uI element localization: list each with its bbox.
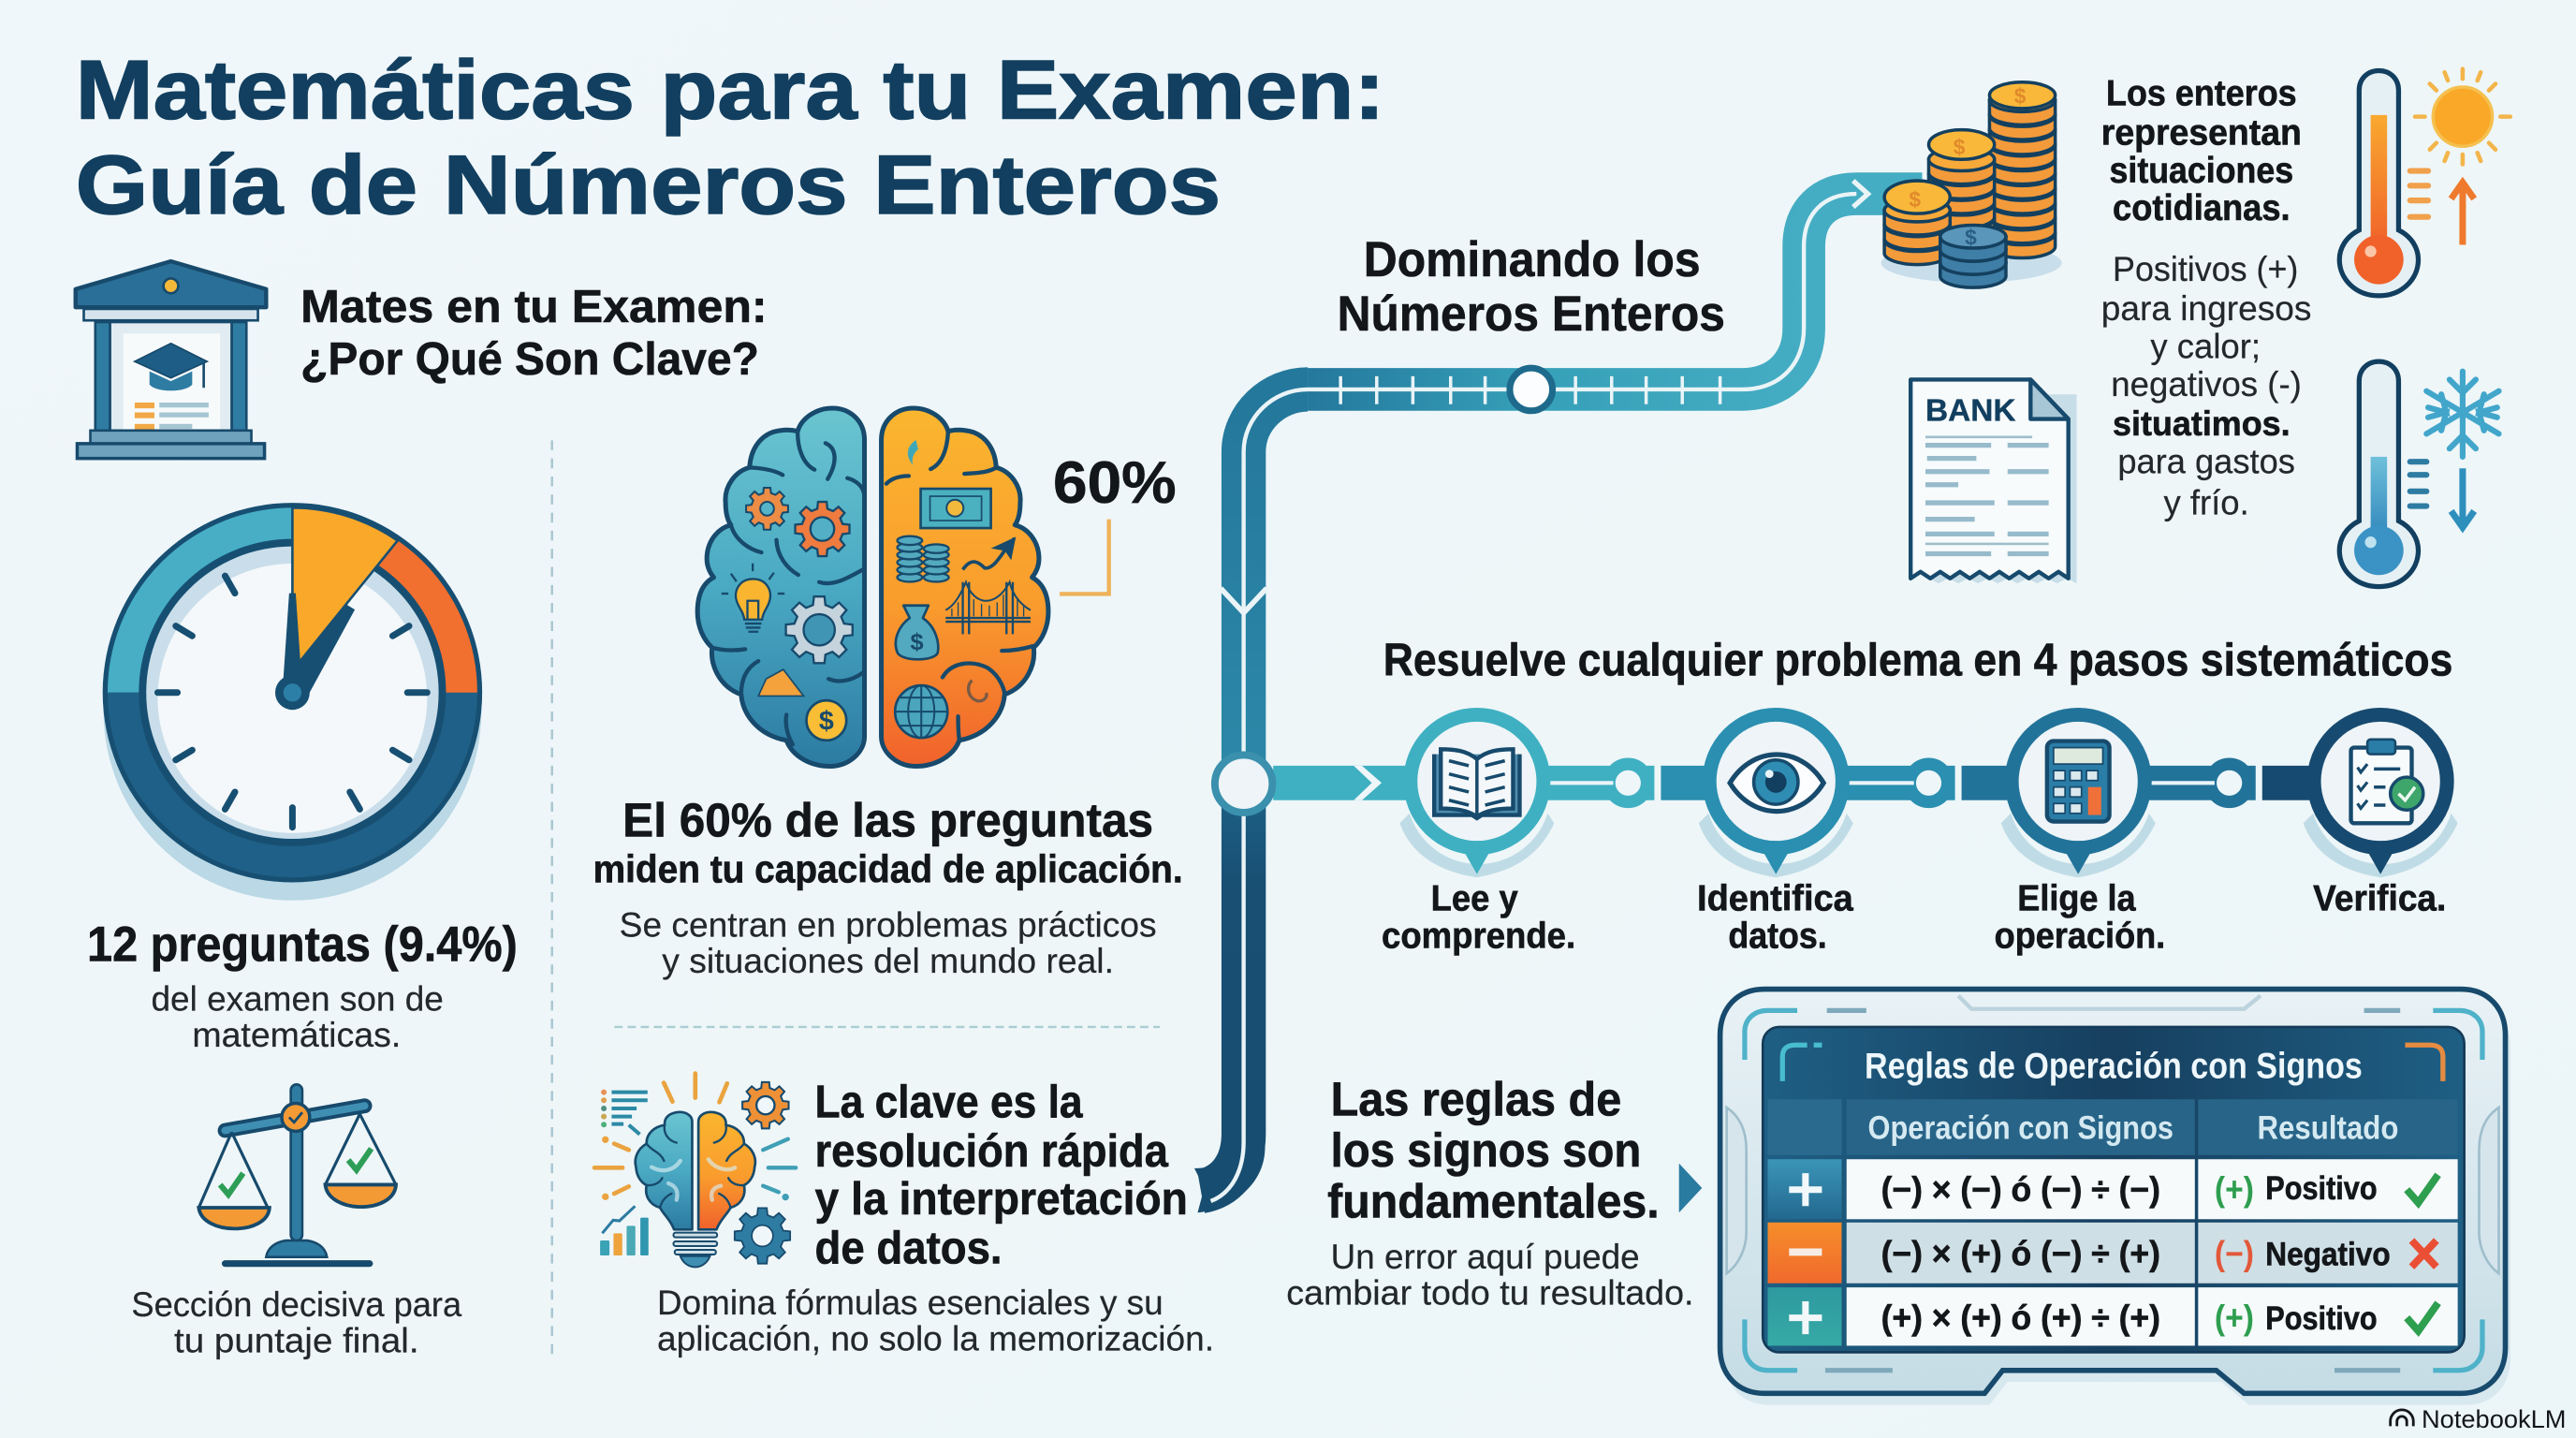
icon: money bag: [896, 606, 938, 659]
table row 2: (−) × (+) ó (−) ÷ (+): [1881, 1234, 2160, 1272]
step 4: verify: [2304, 714, 2458, 918]
text block: enteros cotidianos: Los enteros: [2106, 73, 2297, 113]
icon: bank statement: BANK: [1925, 393, 2016, 428]
text block: enteros cotidianos: [2101, 73, 2311, 521]
icon: cold thermometer: [2339, 361, 2499, 587]
text block: la clave: aplicación, no solo la memorización.: [657, 1320, 1214, 1358]
icon: brain: [697, 408, 1048, 766]
table row 1: [1767, 1159, 2458, 1219]
icon: coin stacks: [1881, 82, 2062, 287]
table row 1: Positivo: [2265, 1170, 2378, 1207]
text block: enteros cotidianos: situaciones: [2110, 151, 2293, 191]
heading: dominando los números enteros: Números Enteros: [1338, 286, 1725, 342]
text block: 60% de las preguntas: y situaciones del mundo real.: [662, 942, 1114, 980]
icon: banknote: [921, 489, 991, 528]
table row 1: (−) × (−) ó (−) ÷ (−): [1881, 1170, 2160, 1209]
text block: enteros cotidianos: representan: [2101, 112, 2302, 153]
step 1: read: [1382, 714, 1575, 957]
text block: enteros cotidianos: para gastos: [2117, 442, 2295, 480]
watermark: NotebookLM: NotebookLM: [2422, 1404, 2566, 1433]
icon: coin stacks: $: [1954, 135, 1966, 159]
title: [76, 42, 1385, 231]
text block: la clave: [657, 1077, 1214, 1358]
table row 2: Negativo: [2265, 1236, 2391, 1272]
icon: rising chart: [963, 538, 1015, 569]
icon: dollar coin: [807, 700, 846, 741]
heading: 4 pasos: Resuelve cualquier problema en 4 pasos sistemáticos: [1383, 635, 2452, 685]
text block: 60% de las preguntas: [593, 793, 1183, 980]
title line 2: Guía de Números Enteros: [76, 138, 1221, 231]
table row 3: (+) × (+) ó (+) ÷ (+): [1881, 1299, 2160, 1337]
table row 3: [1767, 1287, 2458, 1345]
text block: enteros cotidianos: Positivos (+): [2113, 250, 2298, 288]
text block: enteros cotidianos: para ingresos: [2101, 289, 2311, 328]
text block: 60% de las preguntas: El 60% de las preguntas: [622, 793, 1153, 846]
icon: exam building: [76, 261, 266, 459]
callout: 60%: [1053, 450, 1177, 594]
table row 2: [1767, 1223, 2458, 1284]
icon: clock chart: [103, 503, 482, 901]
step 2: identify: datos.: [1728, 917, 1827, 957]
caption: sección decisiva: Sección decisiva para: [131, 1285, 462, 1324]
icon: coin stacks: $: [1965, 226, 1977, 250]
arrow to table: [1679, 1164, 1702, 1212]
icon: hot thermometer: [2339, 69, 2510, 296]
table row 3: Positivo: [2265, 1300, 2378, 1337]
roadmap path: [1194, 181, 1922, 1212]
right hemisphere: [882, 408, 1048, 766]
text block: la clave: y la interpretación: [815, 1174, 1188, 1225]
heading: dominando los números enteros: Dominando los: [1364, 232, 1701, 287]
table panel: reglas de operación: [1720, 990, 2510, 1405]
icon: coin stacks: $: [1909, 187, 1921, 212]
step 2: identify: Identifica: [1697, 878, 1853, 918]
stat: 12 preguntas: del examen son de: [151, 979, 444, 1018]
table title: Reglas de Operación con Signos: [1865, 1046, 2363, 1086]
icon: coin piles: [898, 536, 949, 581]
step 1: read: comprende.: [1382, 917, 1575, 957]
step 4: verify: Verifica.: [2313, 878, 2446, 918]
callout: 60%: 60%: [1053, 450, 1177, 516]
text block: reglas de los signos: los signos son: [1331, 1123, 1641, 1177]
text block: 60% de las preguntas: miden tu capacidad de aplicación.: [593, 846, 1183, 890]
table header: Operación con Signos: [1868, 1109, 2174, 1146]
icon: coin stacks: $: [2014, 84, 2027, 109]
step 3: choose operation: Elige la: [2017, 878, 2136, 918]
text block: la clave: Domina fórmulas esenciales y su: [657, 1284, 1164, 1322]
title line 1: Matemáticas para tu Examen:: [76, 42, 1385, 136]
left hemisphere: [697, 408, 865, 766]
icon: bank statement: [1910, 379, 2076, 583]
icon: globe: [895, 685, 947, 738]
step 1: read: Lee y: [1431, 878, 1518, 918]
table row 1: (+): [2215, 1170, 2254, 1209]
process steps: [1215, 714, 2458, 957]
stat: 12 preguntas: matemáticas.: [192, 1016, 401, 1054]
section heading: exam importance: Mates en tu Examen:: [300, 282, 768, 332]
icon: gears: [746, 488, 853, 663]
text block: la clave: de datos.: [815, 1224, 1003, 1274]
connector nodes: [1609, 764, 2248, 801]
text block: 60% de las preguntas: Se centran en problemas prácticos: [620, 905, 1157, 944]
text block: reglas de los signos: Un error aquí puede: [1331, 1238, 1640, 1276]
text block: enteros cotidianos: y frío.: [2163, 483, 2249, 521]
section heading: exam importance: ¿Por Qué Son Clave?: [300, 334, 759, 385]
text block: reglas de los signos: Las reglas de: [1331, 1073, 1621, 1126]
node: dominando: [1510, 368, 1553, 411]
icon: brain light bulb: [594, 1074, 796, 1267]
icon: bridge: [945, 582, 1031, 634]
text block: enteros cotidianos: y calor;: [2150, 328, 2261, 366]
stat: 12 preguntas: 12 preguntas (9.4%): [87, 917, 518, 973]
text block: la clave: La clave es la: [815, 1077, 1083, 1127]
icon: bulb: [736, 579, 770, 620]
table header: Resultado: [2258, 1109, 2398, 1146]
text block: reglas de los signos: cambiar todo tu resultado.: [1286, 1274, 1694, 1313]
band segments: [1273, 766, 2380, 800]
section heading: exam importance: [300, 282, 768, 385]
text block: enteros cotidianos: cotidianas.: [2113, 188, 2291, 228]
text block: enteros cotidianos: situatimos.: [2113, 404, 2291, 443]
table header: [1767, 1099, 2458, 1155]
text block: enteros cotidianos: negativos (-): [2111, 365, 2302, 404]
node: start: [1215, 755, 1272, 813]
step 2: identify: [1697, 714, 1853, 957]
table background: [1763, 1027, 2465, 1352]
icon: brain: $: [819, 706, 834, 736]
table row 2: (−): [2215, 1234, 2254, 1272]
caption: sección decisiva: tu puntaje final.: [174, 1321, 419, 1359]
step 3: choose operation: [1995, 714, 2165, 957]
icon: balance scale: [198, 1084, 396, 1267]
text block: la clave: resolución rápida: [815, 1126, 1168, 1177]
heading: dominando los números enteros: [1338, 232, 1725, 342]
icon: warning: [758, 669, 804, 696]
step 3: choose operation: operación.: [1995, 917, 2165, 957]
table row 3: (+): [2215, 1299, 2254, 1337]
stat: 12 preguntas: [87, 917, 518, 1054]
panel frame: [1725, 1001, 2510, 1405]
icon: brain: $: [911, 629, 924, 655]
text block: reglas de los signos: [1286, 1073, 1694, 1313]
caption: sección decisiva: [131, 1285, 462, 1359]
text block: reglas de los signos: fundamentales.: [1327, 1175, 1660, 1228]
